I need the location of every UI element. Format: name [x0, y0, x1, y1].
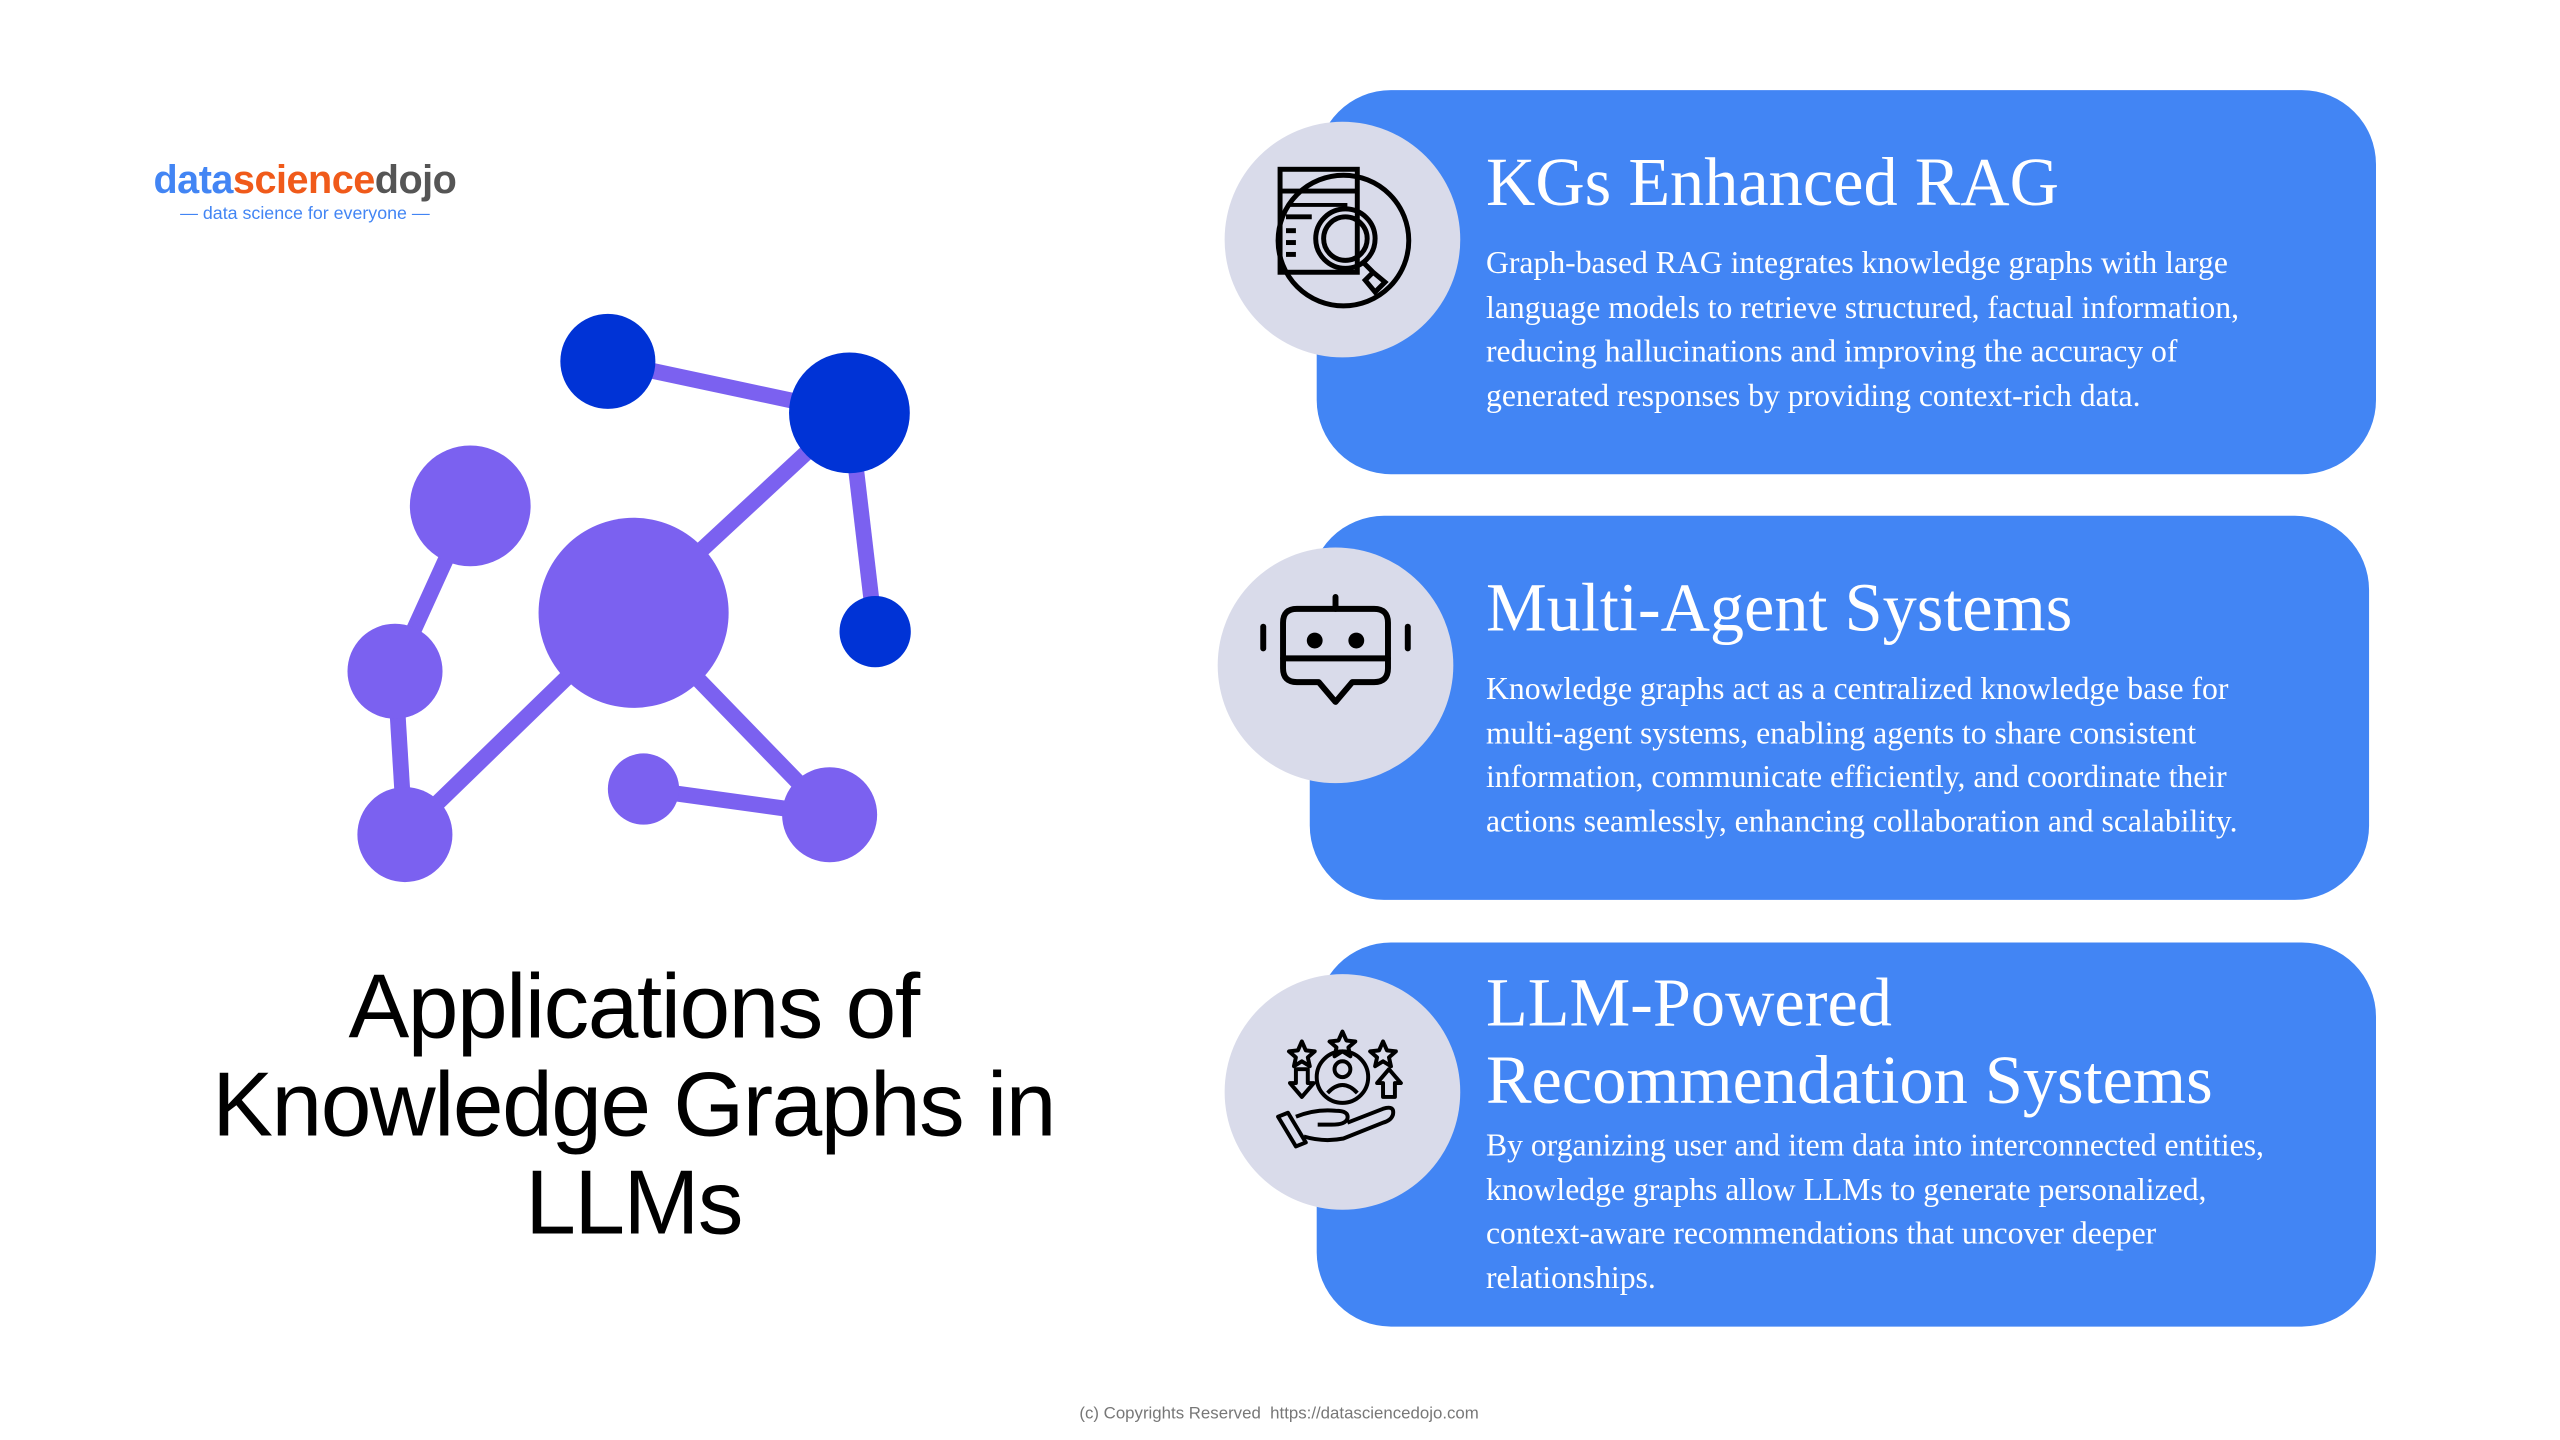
panel: LLM-Powered Recommendation Systems: LLM-Powered	[1486, 965, 1892, 1040]
panel: Multi-Agent Systems: Knowledge graphs act as a centralized knowledge base for multi‑agent systems, enabling agents to share consistent information, communicate efficiently, and coordinate their actions seamlessly, enhancing collaboration and scalability.	[1486, 670, 2238, 838]
logo	[153, 158, 456, 223]
main title: Knowledge Graphs in	[212, 1054, 1055, 1155]
logo: datasciencedojo	[153, 158, 456, 202]
panel: Multi-Agent Systems: Multi-Agent Systems	[1486, 570, 2072, 645]
panel: Multi-Agent Systems	[1218, 516, 2370, 900]
network graph illustration	[348, 314, 911, 882]
panel: KGs Enhanced RAG: Graph-based RAG integrates knowledge graphs with large language models to retrieve structured, factual information, reducing hallucinations and improving the accuracy of generated responses by providing context‑rich data.	[1486, 245, 2239, 412]
main title: Applications of	[349, 956, 919, 1057]
logo: — data science for everyone —	[180, 203, 430, 223]
panel: LLM-Powered Recommendation Systems	[1224, 942, 2376, 1327]
panel: LLM-Powered Recommendation Systems: By organizing user and item data into interconnected entities, knowledge graphs allow LLMs to generate personalized, context‑aware recommendations that uncover deeper relationships.	[1486, 1127, 2264, 1294]
panel: KGs Enhanced RAG	[1224, 90, 2376, 474]
icon: robot chat	[1218, 547, 1453, 783]
footer: (c) Copyrights Reserved https://datasciencedojo.com	[1079, 1404, 1479, 1423]
icon: hand with rated user	[1225, 974, 1460, 1210]
main title	[212, 956, 1055, 1253]
icon: search window	[1225, 122, 1460, 357]
main title: LLMs	[525, 1152, 742, 1253]
panel: KGs Enhanced RAG: KGs Enhanced RAG	[1486, 145, 2059, 220]
panel: LLM-Powered Recommendation Systems: Recommendation Systems	[1486, 1042, 2213, 1118]
